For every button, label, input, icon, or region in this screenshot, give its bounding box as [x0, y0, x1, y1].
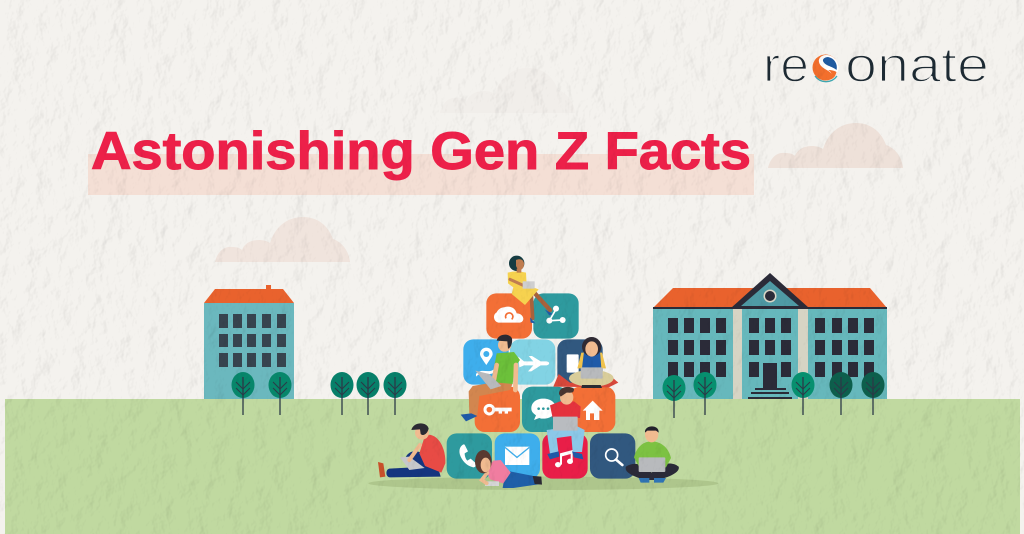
wall — [204, 303, 294, 399]
windows — [219, 314, 286, 367]
tree — [268, 372, 292, 415]
tile: home — [570, 387, 615, 432]
faint cloud behind title — [440, 68, 575, 113]
tree — [662, 375, 686, 418]
person: girl lying with tablet — [475, 450, 542, 488]
person: woman in yellow dress — [508, 256, 553, 323]
title: Astonishing Gen Z Facts — [91, 122, 751, 181]
large building right — [653, 273, 887, 399]
cloud right — [768, 123, 903, 168]
tree — [232, 372, 254, 415]
logo: resonate — [763, 38, 989, 92]
tile: phone — [447, 433, 492, 479]
tree — [330, 372, 354, 415]
person: man lying with book — [378, 423, 445, 477]
pediment inner — [741, 281, 799, 306]
tile: mail — [495, 433, 540, 479]
dark tree — [862, 372, 884, 415]
logo text left: re — [763, 38, 809, 92]
tree — [384, 372, 406, 415]
app tile pyramid with people — [368, 256, 718, 490]
tile: chat — [522, 387, 567, 432]
round window — [764, 290, 776, 302]
person: man in green sweater with laptop — [626, 426, 679, 483]
title highlight strip — [88, 154, 754, 195]
columns — [733, 309, 808, 399]
tile: plane — [510, 339, 555, 385]
dark tree — [830, 372, 852, 415]
tile: search — [590, 433, 635, 479]
tile: location — [463, 339, 509, 385]
lawn — [5, 399, 1020, 534]
person: man in green shirt — [461, 335, 520, 421]
eave line — [653, 307, 887, 309]
pediment — [731, 273, 809, 308]
door and steps — [748, 363, 792, 399]
row of trees — [232, 372, 884, 418]
roof — [204, 289, 294, 303]
small building left — [204, 285, 294, 399]
red cushion — [553, 374, 618, 387]
tile: clipboard — [557, 339, 603, 385]
tile: key — [475, 387, 520, 432]
person: woman with navy vest — [569, 337, 614, 388]
wall — [653, 308, 887, 399]
tree — [694, 372, 716, 415]
cloud left — [215, 217, 350, 262]
chimney — [266, 285, 271, 291]
tile: cloud — [486, 293, 532, 339]
tree — [356, 372, 380, 415]
logo swirl s — [812, 54, 839, 82]
windows — [668, 318, 874, 377]
tile: music — [542, 433, 588, 479]
roof — [653, 288, 887, 308]
person: man in red shirt with laptop — [547, 387, 585, 459]
ground shadow — [368, 477, 718, 490]
tree — [792, 372, 814, 415]
logo text right: onate — [845, 38, 989, 92]
tile: share — [533, 293, 579, 339]
